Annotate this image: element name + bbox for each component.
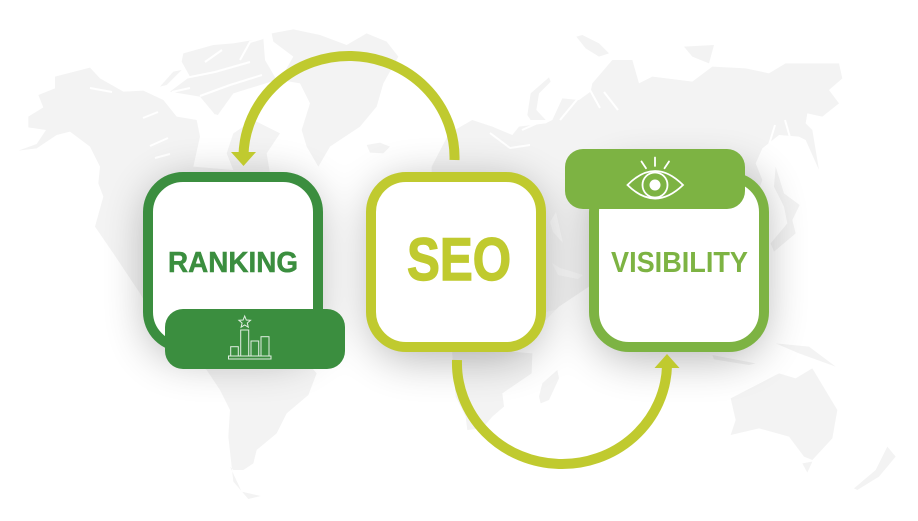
ranking frame: [148, 177, 318, 347]
card: visibility: [565, 149, 764, 347]
visibility badge: [565, 149, 745, 209]
arrow: SEO to visibility: [457, 354, 680, 464]
SEO label: SEO: [407, 226, 511, 293]
icon: ranking bars and star: [228, 316, 271, 359]
map: white channels and gulfs: [90, 38, 798, 165]
card: SEO: [371, 177, 541, 347]
ranking badge: [165, 309, 345, 369]
visibility frame: [594, 177, 764, 347]
arrow: SEO to ranking: [231, 56, 455, 166]
map: eurasia: [432, 35, 842, 350]
map: north america: [18, 29, 459, 499]
soft shadows behind cards: [148, 172, 764, 358]
map: africa: [452, 347, 559, 430]
map: indonesia and australia: [712, 343, 896, 490]
map: red sea and gulf: [546, 212, 583, 320]
SEO frame: [371, 177, 541, 347]
ranking label: RANKING: [168, 247, 298, 279]
card: ranking: [148, 177, 345, 369]
visibility label: VISIBILITY: [611, 247, 748, 279]
icon: eye: [628, 158, 683, 198]
